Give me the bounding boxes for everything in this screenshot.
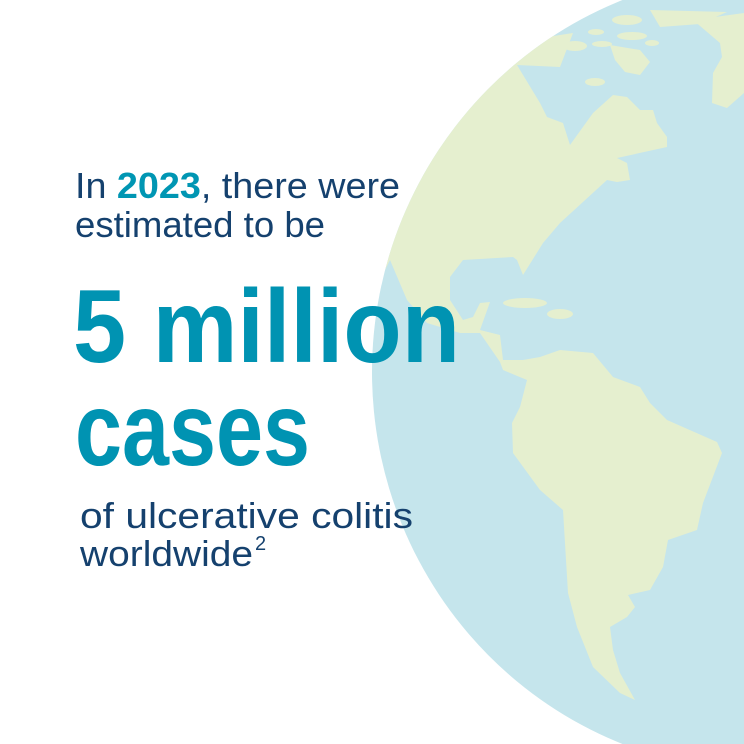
text: intro: In 2023, there were (75, 165, 400, 206)
text: outro: worldwide (79, 533, 253, 574)
headline (73, 269, 460, 488)
globe (372, 0, 744, 744)
text: outro: of ulcerative colitis (80, 495, 413, 536)
headline: cases (75, 372, 310, 488)
continent: americas (385, 33, 722, 700)
text: intro (75, 165, 400, 245)
text: intro: estimated to be (75, 204, 325, 245)
text: outro: 2 (255, 533, 266, 555)
continent: greenland (693, 13, 744, 108)
islands (650, 10, 727, 27)
text: outro (79, 495, 413, 574)
headline: 5 million (73, 269, 460, 385)
